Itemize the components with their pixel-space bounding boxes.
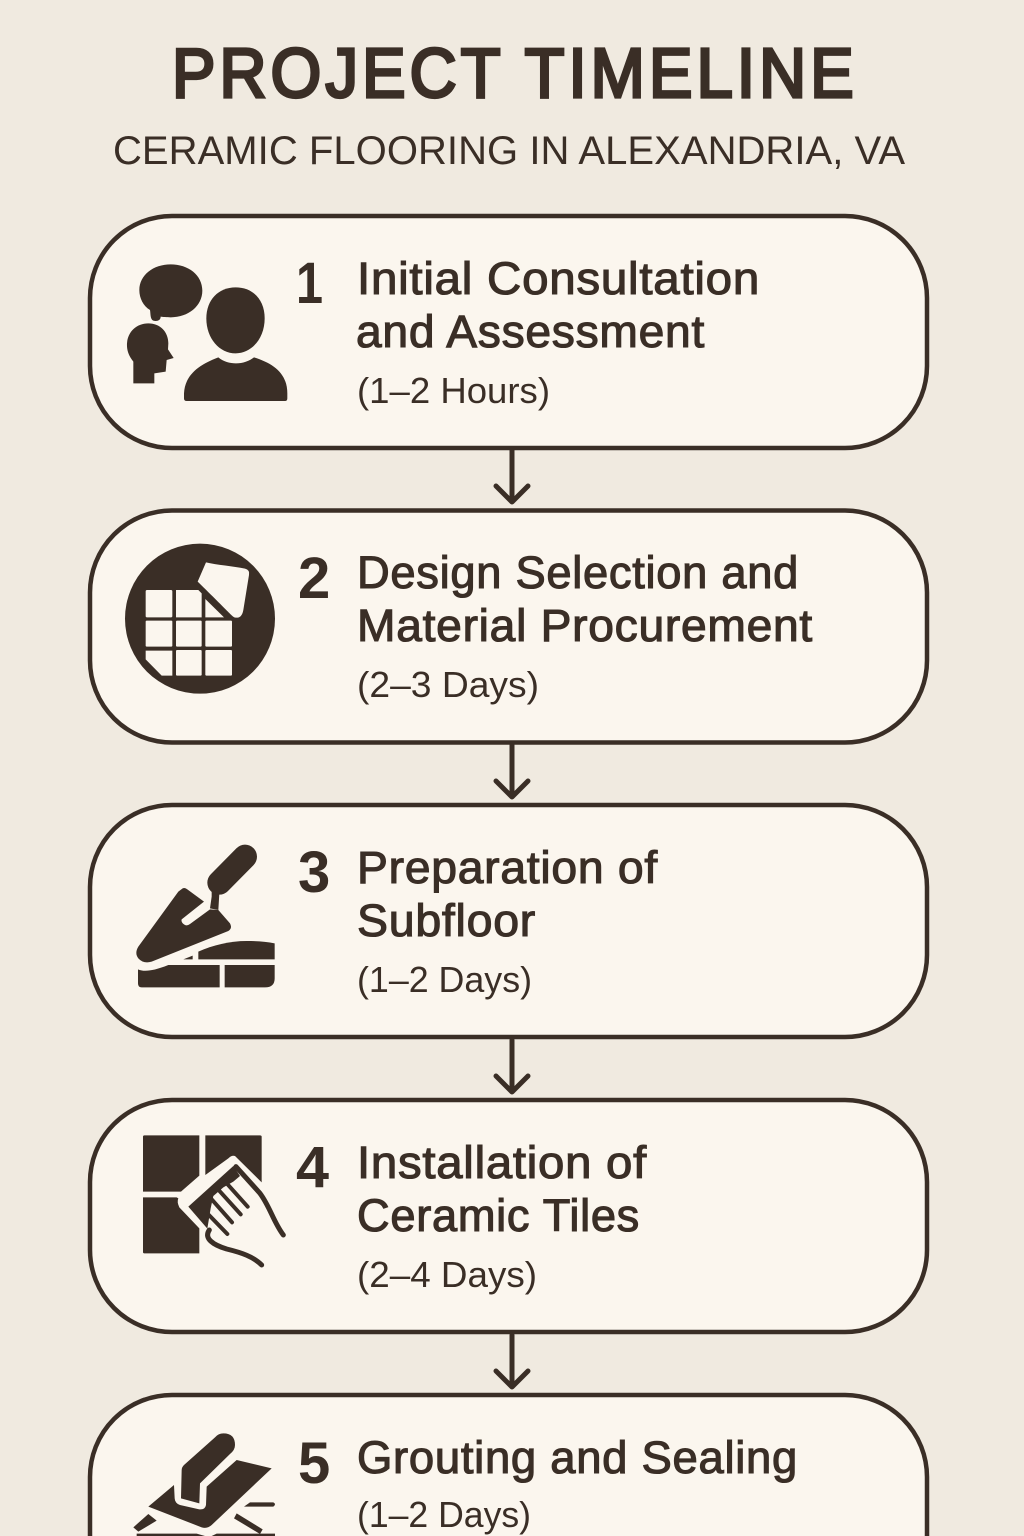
step 3 heading — [357, 842, 658, 946]
step number 5: 5 — [298, 1431, 330, 1496]
panel: step 3 — [90, 805, 927, 1037]
step 2 heading — [357, 547, 813, 651]
arrow: step 3 to 4 — [496, 1040, 528, 1092]
step 2 duration: (2–3 Days) — [357, 664, 539, 705]
step 1 heading: and Assessment — [356, 306, 705, 357]
arrow: step 1 to 2 — [496, 450, 528, 502]
step 4 heading — [357, 1137, 647, 1241]
icon: trowel and bricks — [136, 857, 275, 987]
step 5 heading: Grouting and Sealing — [357, 1432, 798, 1483]
icon: hand placing tile — [143, 1135, 283, 1265]
step number 3: 3 — [298, 840, 330, 905]
step 2 heading: Design Selection and — [357, 547, 799, 598]
step 1 heading — [356, 253, 760, 357]
step 1 duration: (1–2 Hours) — [357, 370, 550, 411]
step 3 duration: (1–2 Days) — [357, 959, 532, 1000]
panel: step 2 — [90, 510, 927, 742]
title: PROJECT TIMELINE — [172, 35, 854, 113]
step number 2: 2 — [298, 546, 330, 611]
step 5 duration: (1–2 Days) — [357, 1494, 531, 1535]
step 4 heading: Ceramic Tiles — [357, 1190, 640, 1241]
icon: consultation people — [127, 264, 287, 401]
subtitle: CERAMIC FLOORING IN ALEXANDRIA, VA — [113, 129, 905, 173]
arrow: step 4 to 5 — [496, 1335, 528, 1387]
step 2 heading: Material Procurement — [357, 600, 813, 651]
step 4 heading: Installation of — [357, 1137, 647, 1188]
step number 4: 4 — [296, 1135, 329, 1200]
panel: step 1 — [90, 216, 927, 448]
icon: grout float — [133, 1433, 275, 1536]
step number 1: 1 — [296, 251, 323, 316]
step 3 heading: Subfloor — [357, 895, 536, 946]
step 3 heading: Preparation of — [357, 842, 658, 893]
step 4 duration: (2–4 Days) — [357, 1254, 537, 1295]
step 1 heading: Initial Consultation — [357, 253, 760, 304]
panel: step 5 — [90, 1395, 927, 1536]
icon: tile selection — [125, 544, 275, 694]
arrow: step 2 to 3 — [496, 745, 528, 797]
panel: step 4 — [90, 1100, 927, 1332]
